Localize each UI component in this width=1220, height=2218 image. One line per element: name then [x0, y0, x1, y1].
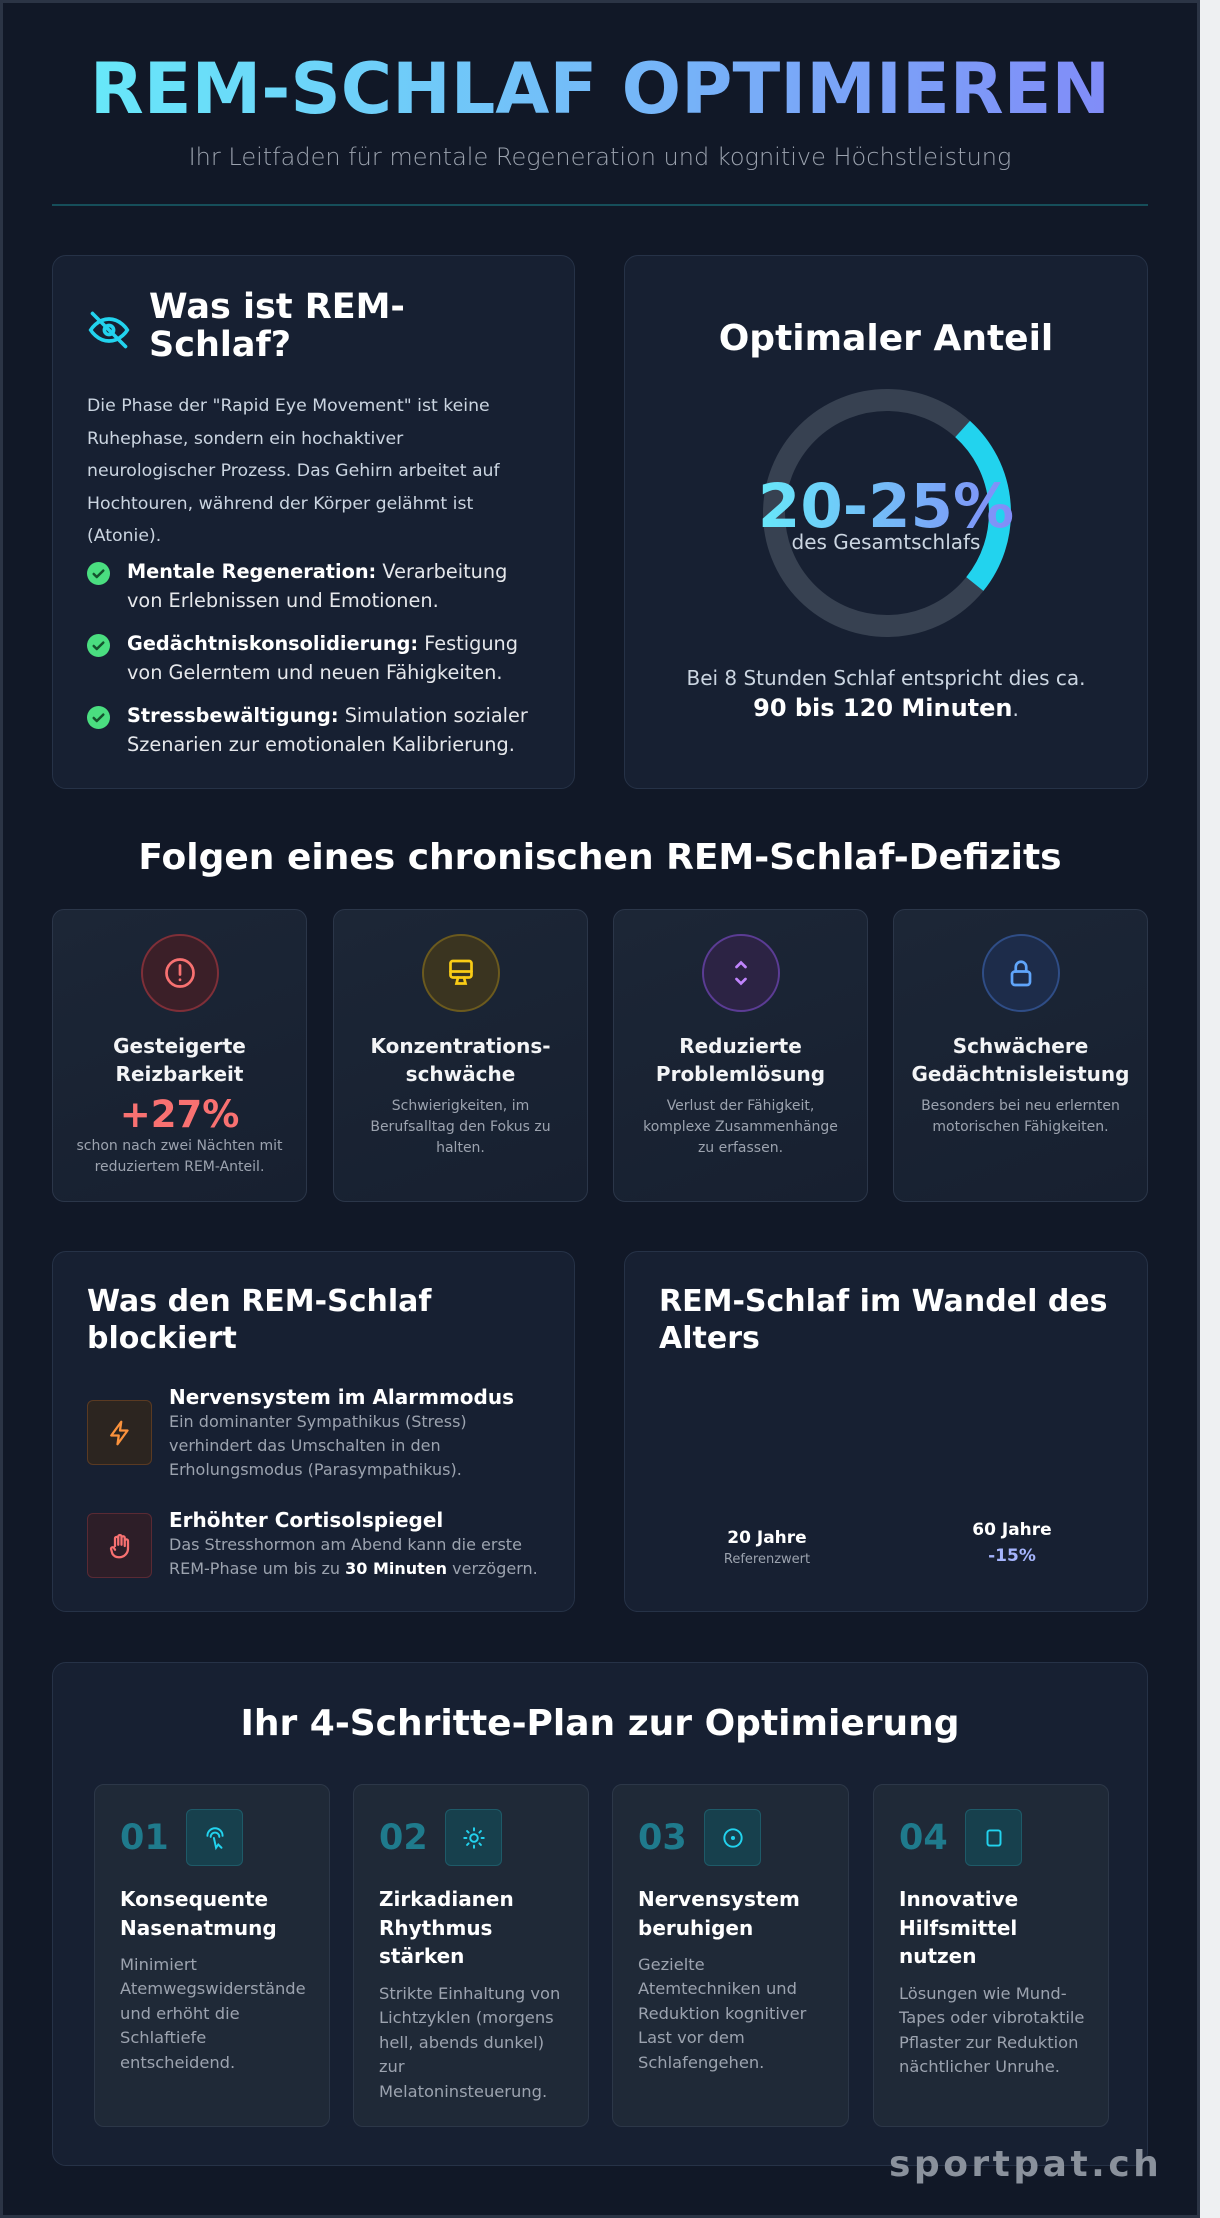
text block: 90 bis 120 Minuten. — [753, 694, 1019, 722]
label: 20 Jahre — [724, 1528, 810, 1567]
icon: lightning — [87, 1400, 152, 1465]
text block: Bei 8 Stunden Schlaf entspricht dies ca. — [686, 666, 1086, 690]
heading: Was ist REM- — [149, 287, 405, 327]
heading: REM-Schlaf im Wandel des — [659, 1284, 1108, 1319]
heading: Ihr 4-Schritte-Plan zur Optimierung — [240, 1703, 960, 1744]
step 02: Rhythmus — [379, 1916, 492, 1940]
subtitle: Ihr Leitfaden für mentale Regeneration und kognitive Höchstleistung — [189, 143, 1011, 171]
item: Cortisol — [87, 1508, 538, 1578]
step 01: 01 — [120, 1818, 169, 1858]
icon: chevrons — [702, 934, 780, 1012]
panel: 4-Schritte-Plan — [52, 1662, 1148, 2166]
icon: lock — [982, 934, 1060, 1012]
icon: monitor — [422, 934, 500, 1012]
step 01: Konsequente — [120, 1887, 268, 1911]
panel: blockiert — [52, 1251, 575, 1612]
step 02 — [353, 1784, 589, 2127]
item: Alarmmodus — [87, 1385, 514, 1479]
step 04: Innovative — [899, 1887, 1018, 1911]
item: Cortisol: Das Stresshormon am Abend kann die erste REM-Phase um bis zu 30 Minuten verzögern. — [169, 1535, 538, 1578]
card: Reizbarkeit: Gesteigerte — [113, 1034, 246, 1058]
step 03 — [612, 1784, 849, 2127]
step 03: beruhigen — [638, 1916, 753, 1940]
text block: Die Phase der "Rapid Eye Movement" ist keine Ruhephase, sondern ein hochaktiver neurologischer Prozess. Das Gehirn arbeitet auf Hochtouren, während der Körper gelähmt ist (Atonie). — [87, 396, 500, 546]
text block — [686, 666, 1086, 722]
icon: alert — [141, 934, 219, 1012]
icon: eye off — [88, 312, 130, 348]
card: Konzentration — [333, 909, 588, 1202]
card: Konzentration: schwäche — [406, 1062, 515, 1086]
icon: hand — [87, 1513, 152, 1578]
step 03: Nervensystem — [638, 1887, 800, 1911]
heading — [149, 287, 405, 365]
step 04 — [873, 1784, 1109, 2127]
stat: 20-25% — [758, 471, 1014, 542]
card: Gedächtnis: Besonders bei neu erlernten motorischen Fähigkeiten. — [921, 1098, 1120, 1135]
step 02: Zirkadianen — [379, 1887, 514, 1911]
heading: Schlaf? — [149, 325, 291, 365]
step 01: Nasenatmung — [120, 1916, 277, 1940]
heading — [87, 1284, 432, 1356]
card: Problemlösung — [613, 909, 868, 1202]
card: Gedächtnis — [893, 909, 1148, 1202]
card: Reizbarkeit: +27% — [120, 1093, 239, 1136]
heading — [659, 1284, 1108, 1356]
step 02: stärken — [379, 1944, 464, 1968]
icon: fingerprint/pointer — [186, 1809, 243, 1866]
heading: Folgen: Folgen eines chronischen REM-Schlaf-Defizits — [138, 837, 1062, 878]
item: Alarmmodus: Nervensystem im Alarmmodus — [169, 1385, 514, 1409]
heading: Was den REM-Schlaf — [87, 1284, 431, 1319]
step 03: Gezielte Atemtechniken und Reduktion kognitiver Last vor dem Schlafengehen. — [638, 1955, 806, 2072]
step 01: Minimiert Atemwegswiderstände und erhöht die Schlaftiefe entscheidend. — [120, 1955, 306, 2072]
label: 20 Jahre: Referenzwert — [724, 1552, 810, 1567]
step 01 — [94, 1784, 330, 2127]
icon: square — [965, 1809, 1022, 1866]
step 04: Lösungen wie Mund-Tapes oder vibrotaktile Pflaster zur Reduktion nächtlicher Unruhe. — [899, 1984, 1084, 2076]
step 04: 04 — [899, 1818, 948, 1858]
card: Problemlösung: Reduzierte — [679, 1034, 802, 1058]
bullet list: Mentale Regeneration: Verarbeitung von Erlebnissen und Emotionen. — [127, 560, 507, 612]
item: Cortisol: Erhöhter Cortisolspiegel — [169, 1508, 443, 1532]
step 03: 03 — [638, 1818, 687, 1858]
title: REM-SCHLAF OPTIMIEREN — [90, 48, 1110, 130]
card: Gedächtnis: Gedächtnisleistung — [912, 1062, 1129, 1086]
donut chart — [763, 389, 1011, 637]
step 02: 02 — [379, 1818, 428, 1858]
panel: Was ist REM-Schlaf — [52, 255, 575, 789]
step 04: Hilfsmittel — [899, 1916, 1017, 1940]
card: Problemlösung: Verlust der Fähigkeit, komplexe Zusammenhänge zu erfassen. — [643, 1098, 838, 1156]
heading: Optimaler Anteil — [719, 318, 1053, 359]
card: Reizbarkeit: schon nach zwei Nächten mit reduziertem REM-Anteil. — [76, 1138, 283, 1175]
bullet list — [87, 560, 528, 756]
label: 60 Jahre — [972, 1520, 1052, 1566]
card: Problemlösung: Problemlösung — [656, 1062, 825, 1086]
heading: blockiert — [87, 1321, 237, 1356]
icon: sun — [445, 1809, 502, 1866]
watermark: sportpat.ch — [889, 2144, 1162, 2185]
step 04: nutzen — [899, 1944, 976, 1968]
bullet list: Gedächtniskonsolidierung: Festigung von Gelerntem und neuen Fähigkeiten. — [127, 632, 518, 684]
card: Reizbarkeit: Reizbarkeit — [116, 1062, 243, 1086]
bullet list: Stressbewältigung: Simulation sozialer Szenarien zur emotionalen Kalibrierung. — [127, 704, 528, 756]
card: Konzentration: Konzentrations- — [370, 1034, 551, 1058]
panel: Alter — [624, 1251, 1148, 1612]
card: Konzentration: Schwierigkeiten, im Berufsalltag den Fokus zu halten. — [370, 1098, 551, 1156]
card: Reizbarkeit — [52, 909, 307, 1202]
step 02: Strikte Einhaltung von Lichtzyklen (morgens hell, abends dunkel) zur Melatoninsteuerung. — [379, 1984, 560, 2101]
label: 20 Jahre: 20 Jahre — [727, 1528, 807, 1548]
item: Alarmmodus: Ein dominanter Sympathikus (Stress) verhindert das Umschalten in den Erholungsmodus (Parasympathikus). — [169, 1412, 467, 1479]
label: 60 Jahre: 60 Jahre — [972, 1520, 1052, 1540]
label: 60 Jahre: -15% — [988, 1546, 1036, 1566]
icon: circle — [704, 1809, 761, 1866]
panel: Optimaler Anteil: des Gesamtschlafs — [792, 530, 980, 554]
heading: Alters — [659, 1321, 760, 1356]
panel: Optimaler Anteil — [624, 255, 1148, 789]
card: Gedächtnis: Schwächere — [953, 1034, 1088, 1058]
